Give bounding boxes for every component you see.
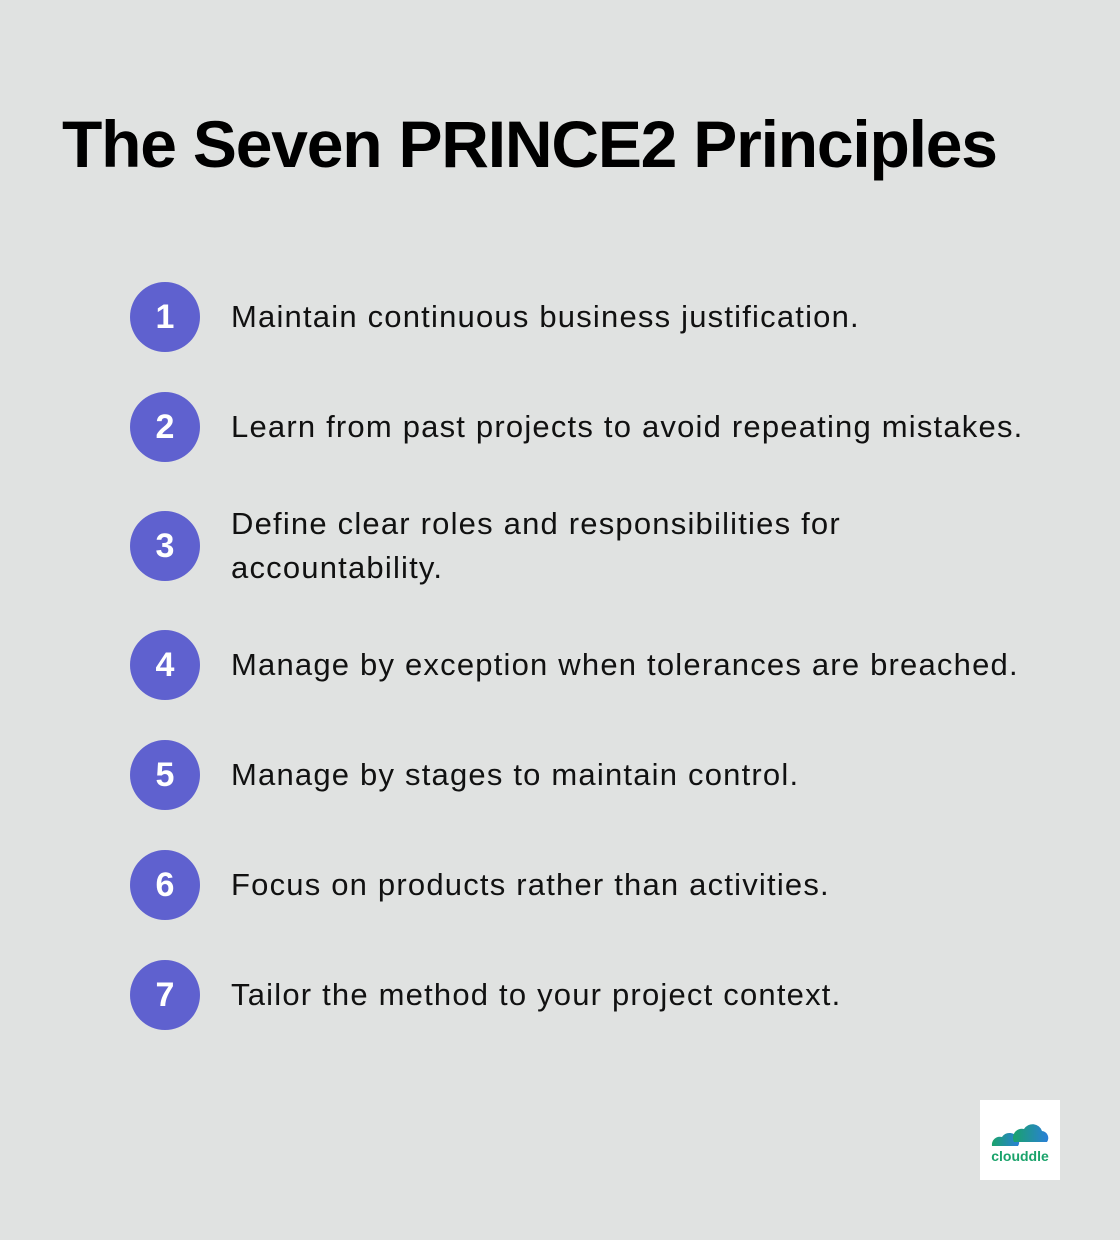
item 4: 4 bbox=[156, 646, 174, 684]
item 1: Maintain continuous business justification. bbox=[231, 299, 860, 334]
item 4: Manage by exception when tolerances are breached. bbox=[231, 647, 1019, 682]
item 7 bbox=[130, 960, 841, 1030]
item 3 bbox=[130, 506, 841, 585]
logo: clouddle bbox=[991, 1148, 1049, 1164]
item 5: 5 bbox=[156, 756, 174, 794]
item 2 bbox=[130, 392, 1023, 462]
item 6: 6 bbox=[156, 866, 174, 904]
logo bbox=[980, 1100, 1060, 1180]
item 6 bbox=[130, 850, 830, 920]
item 2: 2 bbox=[156, 408, 174, 446]
item 3: 3 bbox=[156, 527, 174, 565]
title: The Seven PRINCE2 Principles bbox=[62, 107, 997, 181]
item 4 bbox=[130, 630, 1019, 700]
item 1: 1 bbox=[156, 298, 174, 336]
item 6: Focus on products rather than activities. bbox=[231, 867, 830, 902]
item 3: accountability. bbox=[231, 550, 443, 585]
item 7: Tailor the method to your project context. bbox=[231, 977, 841, 1012]
item 5 bbox=[130, 740, 799, 810]
item 3: Define clear roles and responsibilities for bbox=[231, 506, 841, 541]
item 1 bbox=[130, 282, 860, 352]
item 2: Learn from past projects to avoid repeating mistakes. bbox=[231, 409, 1023, 444]
item 7: 7 bbox=[156, 976, 174, 1014]
item 5: Manage by stages to maintain control. bbox=[231, 757, 799, 792]
